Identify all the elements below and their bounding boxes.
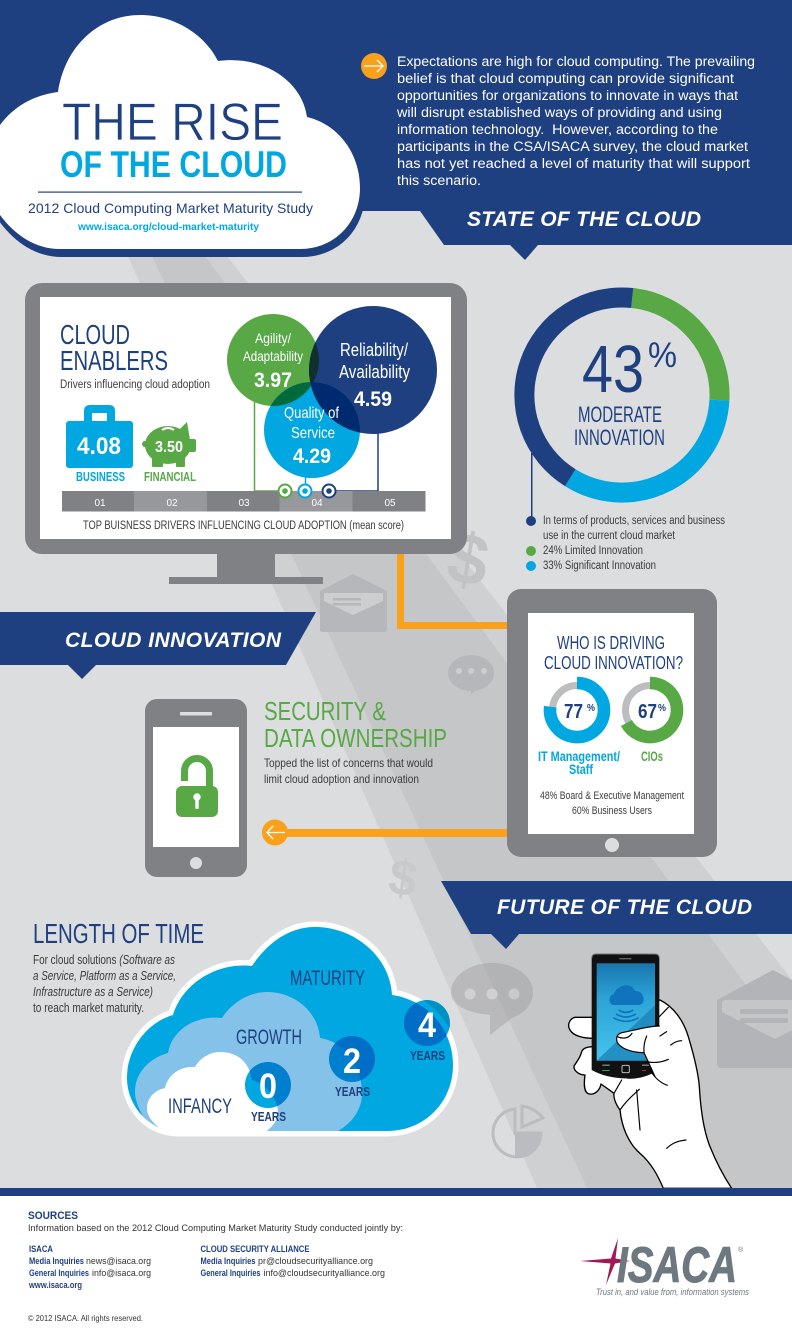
heading: who is driving	[544, 633, 683, 673]
intro text: this scenario.	[397, 173, 481, 188]
text: length of time note: a Service, Platform as a Service,	[33, 969, 176, 983]
heading: security and data ownership: DATA OWNERSHIP	[264, 723, 447, 753]
footer band	[0, 1188, 792, 1332]
panel: monitor cloud enablers	[25, 283, 467, 584]
logo: isaca: ISACA	[617, 1237, 737, 1293]
isaca contacts	[28, 1244, 151, 1291]
circle markers	[245, 1000, 450, 1108]
labels: Staff	[569, 761, 593, 777]
panel: tablet who is driving	[507, 589, 717, 857]
ghost icon: small chat bubble	[448, 655, 494, 694]
icon: piggy bank financial: 3.50	[155, 439, 183, 456]
subtitle: 2012 Cloud Computing Market Maturity Study	[28, 200, 313, 216]
venn label: agility	[243, 330, 303, 392]
heading: who is driving: CLOUD INNOVATION?	[544, 653, 683, 673]
stage labels	[168, 967, 365, 1118]
intro text: will disrupt established ways of providing and using	[396, 105, 722, 120]
url: www.isaca.org/cloud-market-maturity	[77, 221, 259, 233]
heading: cloud enablers	[60, 319, 168, 376]
venn label: reliability: Reliability/	[340, 340, 408, 360]
scale bar 01-05: 05	[384, 498, 396, 509]
logo: isaca	[580, 1237, 749, 1298]
intro text: participants in the CSA/ISACA survey, the cloud market	[397, 139, 748, 154]
csa contacts: Media Inquiries	[200, 1256, 256, 1267]
note lines	[540, 790, 684, 817]
intro text	[396, 54, 755, 188]
donut chart: innovation: MODERATE	[578, 402, 662, 427]
text: security note	[264, 756, 433, 786]
isaca contacts: ISACA	[29, 1244, 53, 1255]
venn label: reliability: Availability	[339, 362, 410, 382]
year numbers	[259, 1006, 436, 1106]
banner: future of the cloud	[441, 881, 792, 949]
donut legend: In terms of products, services and business	[543, 515, 725, 527]
isaca contacts: info@isaca.org	[92, 1268, 151, 1279]
ghost icon: pie chart	[493, 1106, 543, 1157]
text: security note: limit cloud adoption and innovation	[264, 772, 419, 786]
text: length of time note: Infrastructure as a Service)	[33, 985, 153, 999]
donut chart: innovation: %	[648, 336, 677, 375]
text: security note: Topped the list of concerns that would	[264, 756, 433, 770]
title line 1: THE RISE	[62, 93, 283, 152]
text: length of time note: For cloud solutions (Software as	[33, 953, 175, 967]
ghost icon: dollar large: $	[441, 517, 495, 603]
banner: future of the cloud: FUTURE OF THE CLOUD	[497, 896, 752, 919]
footer sources: Information based on the 2012 Cloud Computing Market Maturity Study conducted jointly by:	[28, 1223, 403, 1234]
connector: orange tablet to security	[275, 829, 508, 837]
stage labels: MATURITY	[290, 967, 365, 990]
scale bar 01-05: 01	[94, 498, 106, 509]
note lines: 60% Business Users	[572, 805, 652, 817]
scale bar 01-05: 03	[238, 498, 250, 509]
donut legend: 33% Significant Innovation	[543, 560, 656, 572]
icon: briefcase business: 4.08	[77, 433, 121, 460]
intro text: opportunities for organizations to innovate in ways that	[397, 88, 738, 103]
intro text: information technology. However, according to the	[397, 122, 718, 137]
copyright: © 2012 ISACA. All rights reserved.	[28, 1314, 143, 1323]
heading: state of the cloud: STATE OF THE CLOUD	[467, 208, 701, 231]
csa contacts: info@cloudsecurityalliance.org	[264, 1268, 385, 1279]
intro text: Expectations are high for cloud computing. The prevailing	[397, 54, 755, 69]
title line 2: OF THE CLOUD	[60, 144, 287, 185]
year labels	[251, 1048, 445, 1124]
heading: security and data ownership: SECURITY &	[264, 696, 386, 726]
intro text: belief is that cloud computing can provide significant	[397, 71, 734, 86]
venn label: agility: Adaptability	[243, 348, 303, 364]
scale markers	[278, 484, 336, 498]
donut chart: innovation	[524, 297, 720, 493]
donut legend: use in the current cloud market	[543, 530, 676, 542]
donut: 67 percent: %	[658, 703, 666, 714]
venn label: quality: 4.29	[293, 445, 331, 468]
year numbers: 2	[343, 1042, 361, 1081]
icon: phone with lock	[145, 699, 247, 877]
icon: orange arrow intro	[361, 53, 387, 79]
donut: 77 percent: 77	[564, 701, 583, 723]
footer sources: SOURCES	[28, 1210, 78, 1222]
connector: orange monitor to tablet	[400, 553, 507, 626]
donut: 77 percent: %	[587, 703, 595, 714]
icon: briefcase business: BUSINESS	[76, 469, 125, 484]
csa contacts: General Inquiries	[200, 1268, 260, 1279]
year numbers: 4	[418, 1006, 436, 1045]
icon: briefcase business	[66, 405, 133, 484]
year labels: YEARS	[410, 1048, 445, 1063]
isaca contacts: news@isaca.org	[86, 1256, 151, 1267]
donut legend: 24% Limited Innovation	[543, 545, 643, 557]
cloud: infancy	[147, 1052, 278, 1136]
heading: length of time: LENGTH OF TIME	[33, 918, 204, 949]
donut: 67 percent	[626, 683, 677, 737]
header band	[0, 0, 792, 260]
labels: IT Management/	[538, 748, 620, 764]
donut: 67 percent: 67	[638, 701, 657, 723]
scale bar 01-05: 02	[166, 498, 178, 509]
isaca contacts: Media Inquiries	[29, 1256, 84, 1267]
stage labels: INFANCY	[168, 1095, 232, 1118]
caption: TOP BUISNESS DRIVERS INFLUENCING CLOUD ADOPTION (mean score)	[83, 520, 404, 532]
icon: piggy bank financial	[142, 422, 196, 484]
csa contacts: pr@cloudsecurityalliance.org	[258, 1256, 373, 1267]
venn label: quality: Quality of	[284, 405, 339, 422]
year labels: YEARS	[335, 1084, 370, 1099]
year numbers: 0	[259, 1067, 277, 1106]
donut: 77 percent	[550, 683, 604, 737]
isaca contacts: www.isaca.org	[28, 1280, 82, 1291]
labels	[538, 748, 663, 777]
icon: orange arrow security	[262, 820, 288, 846]
donut chart: innovation: INNOVATION	[574, 425, 665, 450]
scale bar 01-05: 04	[311, 498, 323, 509]
venn diagram	[227, 306, 437, 478]
title cloud	[0, 15, 362, 254]
text: length of time note: to reach market maturity.	[33, 1001, 144, 1015]
cloud: growth	[135, 992, 362, 1140]
venn label: quality	[284, 405, 339, 468]
venn label: reliability	[339, 340, 410, 411]
year labels: YEARS	[251, 1109, 286, 1124]
ghost icon: envelope	[320, 574, 387, 632]
cloud: maturity	[127, 927, 453, 1131]
logo: isaca: ®	[738, 1246, 744, 1254]
venn label: reliability: 4.59	[354, 388, 392, 411]
csa contacts: CLOUD SECURITY ALLIANCE	[200, 1244, 310, 1255]
intro text: has not yet reached a level of maturity that will support	[397, 156, 750, 171]
heading: cloud enablers: ENABLERS	[60, 345, 168, 376]
leader lines	[254, 400, 378, 491]
scale bar 01-05	[62, 491, 426, 512]
labels: CIOs	[641, 748, 663, 764]
donut legend	[526, 453, 725, 572]
banner: cloud innovation: CLOUD INNOVATION	[65, 629, 282, 652]
logo: isaca: Trust in, and value from, information systems	[596, 1287, 749, 1298]
ghost icon: dollar small: $	[385, 848, 421, 908]
icon: hand holding phone	[569, 954, 732, 1188]
isaca contacts: General Inquiries	[29, 1268, 89, 1279]
heading: cloud enablers: CLOUD	[60, 319, 130, 350]
donut chart: innovation: 43	[582, 332, 644, 407]
venn label: agility: 3.97	[254, 369, 292, 392]
heading: who is driving: WHO IS DRIVING	[557, 633, 665, 653]
venn label: quality: Service	[291, 425, 335, 442]
icon: piggy bank financial: FINANCIAL	[144, 469, 196, 484]
chart: maturity clouds	[127, 927, 453, 1140]
subheading drivers: Drivers influencing cloud adoption	[60, 379, 210, 391]
text: length of time note	[33, 953, 176, 1015]
csa contacts	[200, 1244, 385, 1279]
banner: cloud innovation	[0, 612, 316, 679]
stage labels: GROWTH	[236, 1026, 302, 1049]
footer sources	[28, 1210, 403, 1323]
heading: security and data ownership	[264, 696, 447, 753]
ghost icon: big envelope	[717, 970, 792, 1068]
venn label: agility: Agility/	[255, 330, 291, 346]
note lines: 48% Board & Executive Management	[540, 790, 684, 802]
ghost icon: big chat bubble	[451, 963, 533, 1035]
